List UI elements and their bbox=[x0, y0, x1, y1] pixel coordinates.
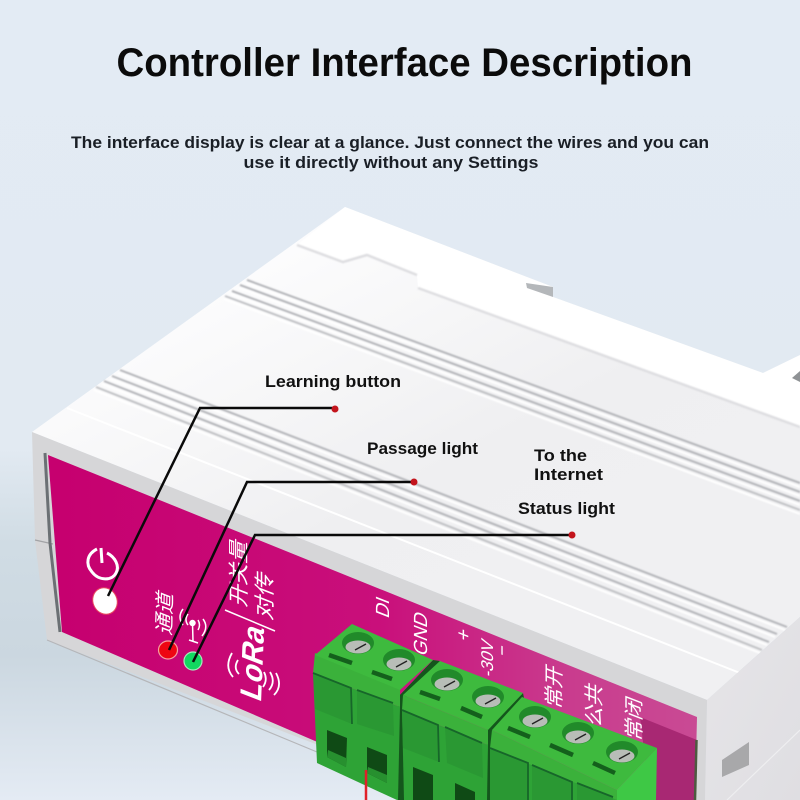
panel right shadow bbox=[695, 740, 696, 800]
upper rib group bbox=[224, 280, 800, 514]
panel divider bbox=[225, 610, 275, 631]
panel label: DI: DI bbox=[373, 594, 394, 621]
panel label: voltage: + bbox=[453, 625, 475, 645]
panel label: GND: GND bbox=[411, 608, 432, 659]
callout: to the internet bbox=[534, 447, 604, 484]
callout: to the internet: Internet bbox=[534, 466, 604, 484]
panel label: voltage: -30V bbox=[478, 636, 497, 680]
side slot bbox=[722, 742, 749, 777]
panel label: switch quantity: 开关量 bbox=[227, 535, 251, 610]
callout: learning button bbox=[108, 373, 401, 596]
panel labels: relay terminals: 公共 bbox=[583, 679, 606, 730]
panel labels: relay terminals: 常闭 bbox=[623, 693, 646, 744]
learning button bbox=[88, 584, 122, 618]
rear raised rail bbox=[297, 207, 800, 427]
terminal block 2 bbox=[402, 661, 523, 800]
icon: antenna bbox=[180, 609, 206, 643]
callout: passage light bbox=[169, 440, 479, 650]
frame bottom edge bbox=[47, 640, 317, 752]
callout: learning button: Learning button bbox=[265, 373, 401, 391]
callout: to the internet: To the bbox=[534, 447, 587, 465]
controller device bbox=[32, 207, 800, 800]
side face crease bbox=[727, 730, 800, 800]
right clip bbox=[792, 371, 800, 382]
front frame bbox=[32, 432, 707, 800]
panel label: channel: 通道 bbox=[153, 587, 177, 638]
subtitle text bbox=[71, 133, 709, 172]
terminal gaps bbox=[397, 660, 524, 800]
subtitle text: The interface display is clear at a glance. Just connect the wires and you can bbox=[71, 133, 709, 152]
panel labels: relay terminals: 常开 bbox=[543, 661, 566, 712]
callout: status light: Status light bbox=[518, 500, 616, 518]
status light bbox=[184, 652, 202, 670]
title: Controller Interface Description bbox=[116, 41, 692, 85]
panel shaded corner bbox=[640, 717, 697, 800]
frame seam bbox=[35, 540, 53, 544]
red wire bbox=[365, 770, 367, 800]
top face highlight bbox=[67, 408, 740, 673]
panel label: transparent transfer: 对传 bbox=[253, 567, 277, 623]
panel label: voltage: − bbox=[492, 641, 512, 660]
terminal block 3 bbox=[490, 697, 657, 800]
callout: passage light: Passage light bbox=[367, 440, 479, 458]
terminal block 1 bbox=[313, 624, 433, 800]
icon: power symbol bbox=[88, 548, 117, 579]
subtitle text: use it directly without any Settings bbox=[244, 153, 538, 172]
LoRa logo: LoRa bbox=[234, 618, 271, 706]
device side face bbox=[705, 617, 800, 800]
rail shadow bbox=[297, 245, 800, 427]
panel labels: relay terminals bbox=[543, 661, 646, 744]
magenta front panel bbox=[48, 455, 697, 800]
rear clip notch bbox=[526, 283, 553, 297]
passage light bbox=[158, 641, 178, 659]
panel slit bbox=[45, 453, 60, 632]
callout: status light bbox=[193, 500, 616, 662]
lower rib group bbox=[94, 370, 787, 653]
device top face bbox=[32, 207, 800, 700]
panel label: voltage bbox=[453, 625, 512, 680]
